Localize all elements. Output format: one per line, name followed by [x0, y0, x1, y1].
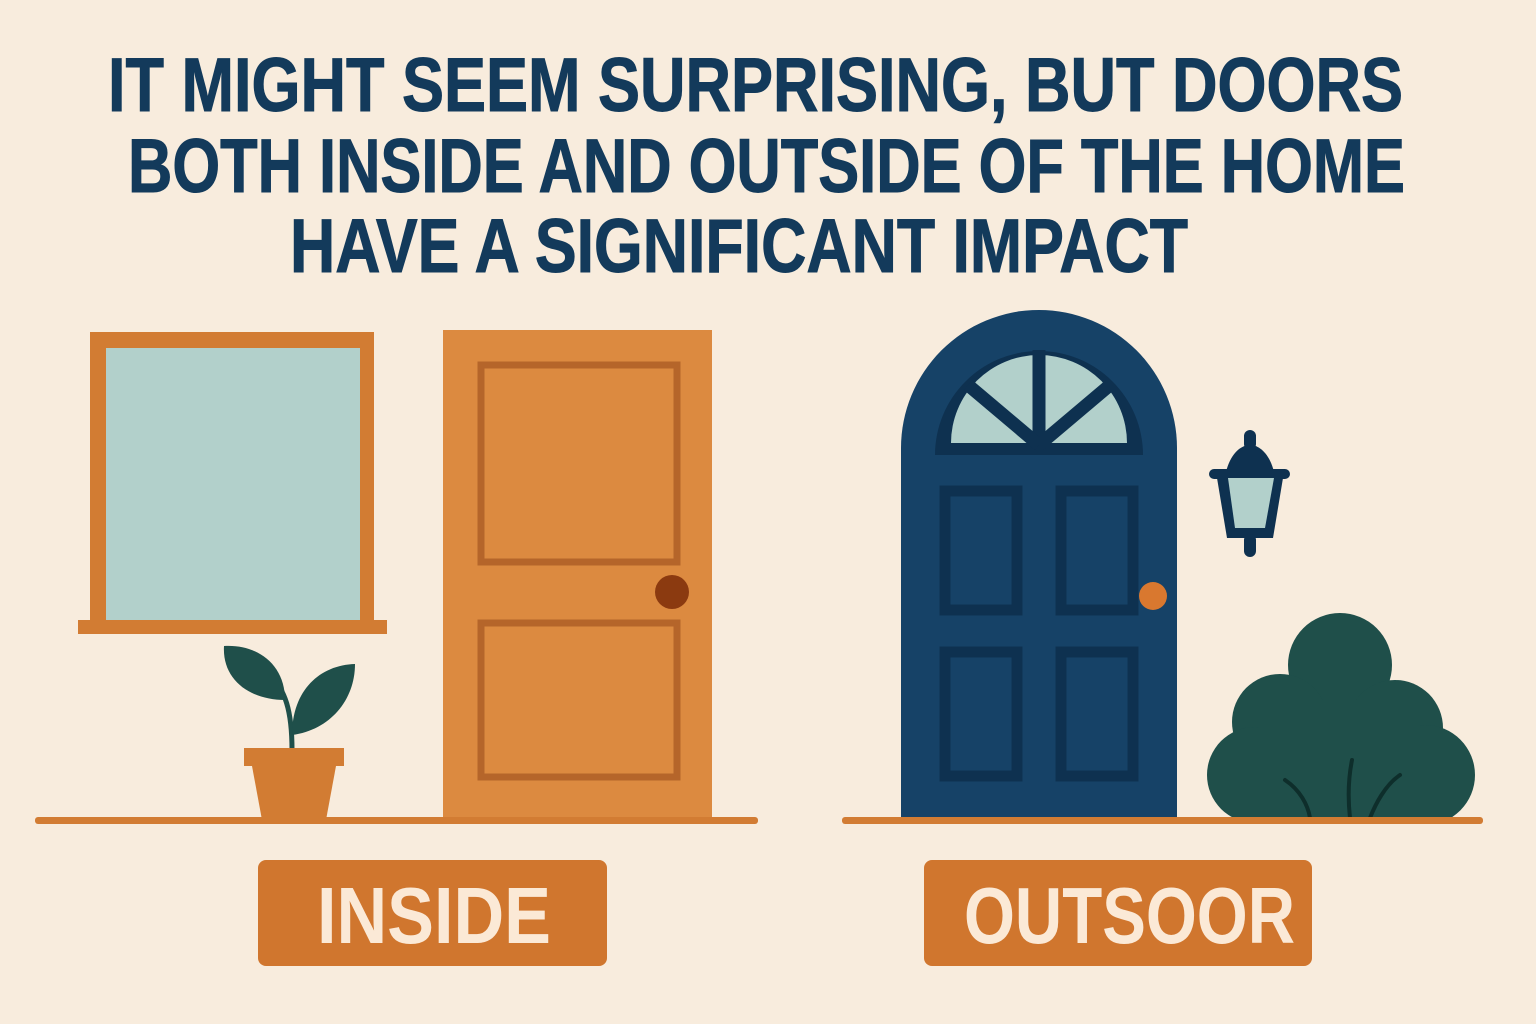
title: HAVE A SIGNIFICANT IMPACT	[290, 204, 1188, 289]
label: outdoor: OUTSOOR	[964, 871, 1295, 960]
window	[78, 332, 387, 634]
door: outdoor	[901, 310, 1177, 818]
floor line	[35, 817, 758, 824]
bush	[1207, 613, 1475, 825]
floor line	[842, 817, 1483, 824]
title	[108, 43, 1405, 289]
door: inside	[443, 330, 712, 822]
label: inside	[258, 860, 607, 966]
plant	[224, 646, 355, 820]
panel: inside scene	[35, 330, 758, 824]
label: outdoor	[924, 860, 1312, 966]
icon: wall lamp	[1209, 430, 1290, 557]
panel: outdoor scene	[842, 310, 1483, 825]
label: inside: INSIDE	[317, 871, 551, 960]
